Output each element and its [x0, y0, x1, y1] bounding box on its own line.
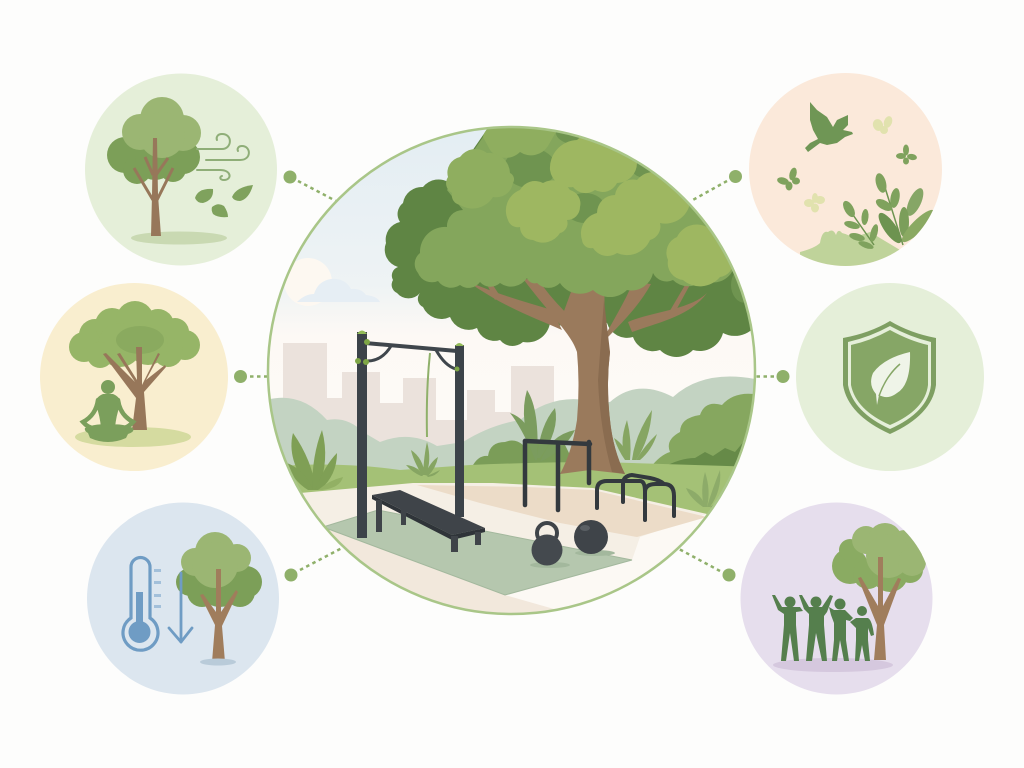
icon: tree: [69, 301, 200, 430]
ground shadow: [773, 658, 893, 672]
icon: butterflies: [776, 115, 917, 212]
parallel bars: [597, 475, 674, 520]
connector: bottom right: [679, 549, 736, 582]
panel: community: [740, 502, 932, 694]
connector: bottom left: [284, 548, 342, 582]
panel: mental wellbeing: [40, 283, 228, 471]
connector: middle left: [234, 370, 268, 383]
medicine ball: [574, 520, 615, 556]
canopy light leaf clusters: [483, 128, 556, 158]
canopy shadow patches: [506, 132, 744, 303]
ground shadow: [200, 658, 236, 666]
lower ground band: [330, 530, 554, 612]
icon: bird: [805, 102, 853, 152]
left plant: [287, 430, 343, 490]
kettlebell: [530, 523, 570, 568]
tree canopy mid layer: [414, 132, 732, 297]
icon: thermometer: [123, 558, 161, 650]
small center plant: [406, 442, 440, 477]
panel: air purification: [85, 74, 277, 266]
right bush: [654, 394, 753, 466]
main circle ring: [268, 127, 755, 614]
icon: meditating person: [83, 380, 133, 442]
icon: tree: [832, 523, 926, 660]
city skyline: [283, 343, 554, 452]
pull-up frame: [355, 330, 464, 538]
panel: central park scene: [260, 119, 760, 625]
mat: [323, 510, 632, 595]
tree canopy dark layer: [385, 125, 760, 357]
ground shadow: [131, 232, 227, 244]
panel: protection: [796, 283, 984, 471]
ground shadow: [75, 427, 191, 447]
icon: tree: [107, 97, 201, 236]
mid bush: [473, 440, 569, 465]
foliage: [800, 173, 933, 266]
trunk shading: [598, 300, 625, 474]
panel: biodiversity: [749, 73, 942, 275]
center plant: [510, 390, 575, 441]
hills: [271, 376, 754, 470]
icon: people: [772, 595, 874, 661]
grass: [292, 462, 734, 514]
connector: middle right: [755, 370, 790, 383]
sky: [278, 130, 486, 308]
bench: [372, 490, 485, 552]
connector: top left: [284, 170, 336, 201]
icon: shield with leaf: [843, 321, 936, 434]
panel: cooling: [87, 502, 279, 694]
ground: [302, 483, 707, 560]
pale path: [506, 514, 706, 609]
dip bars: [525, 441, 590, 510]
far right plant: [686, 470, 720, 508]
icon: falling leaves: [195, 185, 253, 217]
cloud: [284, 258, 380, 306]
icon: wind: [197, 134, 249, 180]
infographic illustration: [40, 73, 984, 694]
icon: tree: [176, 532, 262, 662]
connector: top right: [691, 170, 742, 201]
sand patch: [417, 485, 707, 537]
right plant: [614, 410, 657, 460]
tree trunk and branches: [467, 270, 707, 474]
icon: down arrow: [169, 573, 192, 642]
